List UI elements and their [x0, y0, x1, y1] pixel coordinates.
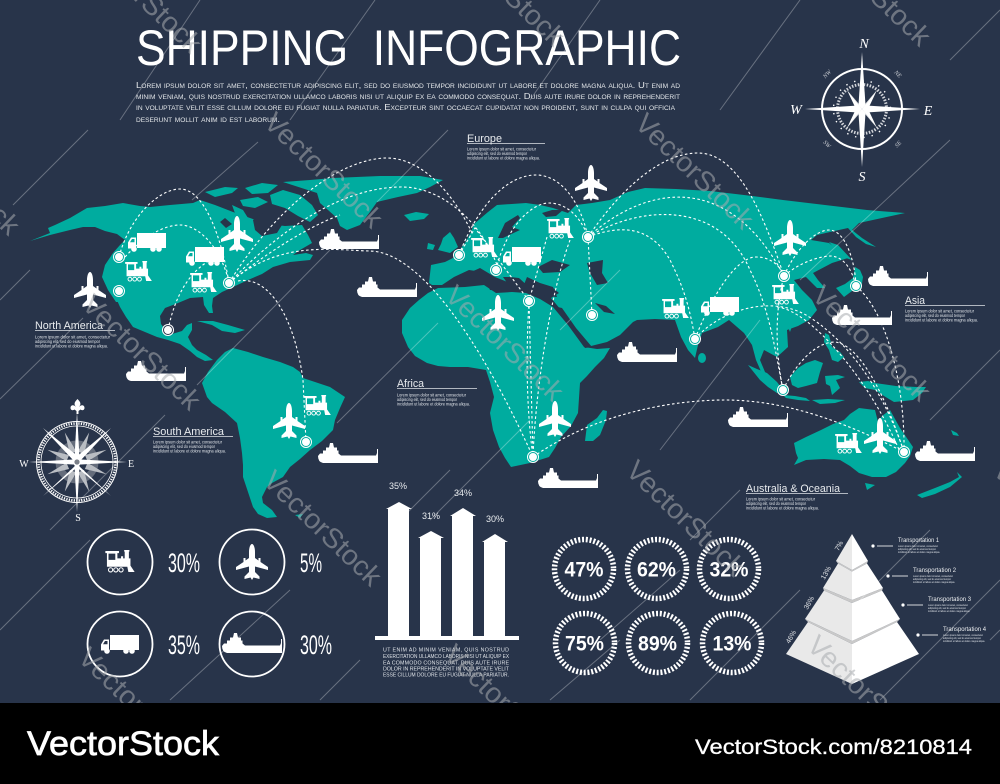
compass rose: top right: NW — [822, 69, 834, 81]
pyramid legend: Transportation 1: Transportation 1 — [898, 538, 940, 544]
bar chart caption: EA COMMODO CONSEQUAT. DUIS AUTE IRURE — [383, 660, 509, 666]
label: North America: North America — [35, 320, 104, 332]
pyramid legend: Transportation 2: Transportation 2 — [913, 568, 957, 574]
compass rose: bottom left — [19, 399, 134, 524]
pyramid legend: Transportation 3: incididunt ut labore et dolore magna aliqua. — [928, 609, 970, 613]
pyramid legend: Transportation 2: Lorem ipsum dolor sit amet, consectetur — [913, 574, 953, 578]
label: Africa: incididunt ut labore et dolore magna aliqua. — [397, 402, 470, 406]
transport share: train 30% — [88, 530, 200, 594]
label: Africa — [397, 378, 477, 406]
watermark: VectorStock — [72, 641, 204, 770]
map icons: trucks — [128, 233, 739, 316]
transport share: truck 35%: 35% — [168, 630, 200, 660]
dial 13%: 13% — [712, 632, 752, 656]
land: Canadian Arctic islands — [205, 183, 318, 222]
label: South America: adipiscing elit, sed do eiusmod tempor — [153, 444, 216, 449]
dial 75%: 75% — [565, 632, 604, 656]
land: Taiwan and Philippines — [788, 326, 844, 362]
watermark: VectorStock — [258, 106, 390, 235]
label: Europe: adipiscing elit, sed do eiusmod tempor — [467, 151, 528, 156]
intro paragraph: in voluptate velit esse cillum dolore eu fugiat nulla pariatur. Excepteur sint occaecat cupidatat non proident, sunt in culpa qui officia — [136, 102, 675, 112]
transport share: ship 30%: 30% — [300, 630, 332, 660]
pyramid legend: Transportation 1: incididunt ut labore et dolore magna aliqua. — [898, 550, 940, 554]
label: Europe — [467, 133, 545, 160]
inland seas — [220, 210, 615, 348]
dial 13% — [702, 614, 762, 672]
pyramid legend: Transportation 1: adipiscing elit, sed do eiusmod tempor — [898, 547, 936, 551]
label: Asia: adipiscing elit, sed do eiusmod tempor — [905, 313, 966, 318]
footer image id: VectorStock.com/8210814 — [695, 736, 972, 759]
bar chart caption: UT ENIM AD MINIM VENIAM, QUIS NOSTRUD — [383, 648, 509, 654]
label: South America — [153, 426, 233, 454]
dial 32% — [700, 540, 758, 598]
land: Sri Lanka — [698, 353, 706, 363]
map icons: trains — [125, 218, 862, 453]
land: Java and Sunda — [783, 395, 845, 404]
label: South America: Lorem ipsum dolor sit amet, consectetur — [153, 440, 223, 444]
compass rose: top right: N — [858, 37, 869, 52]
dial 47% — [554, 540, 614, 598]
dial 62%: 62% — [637, 558, 676, 582]
land: Caribbean — [197, 321, 245, 333]
dial 62% — [628, 540, 686, 598]
compass rose: top right — [790, 37, 933, 185]
arrow bar chart: 34% — [454, 488, 472, 498]
land: Sumatra — [748, 365, 783, 394]
label: Asia: Asia — [905, 295, 926, 307]
map icons: ships — [126, 229, 975, 488]
intro paragraph: deserunt mollit anim id est laborum. — [136, 114, 280, 124]
arrow bar chart: 30% — [486, 514, 504, 524]
pyramid legend: Transportation 3: Transportation 3 — [928, 597, 972, 603]
land: Madagascar — [585, 410, 607, 441]
pyramid chart: 46% — [785, 629, 798, 645]
land: North America — [30, 200, 313, 361]
pyramid legend: Transportation 4: adipiscing elit, sed do eiusmod tempor — [943, 636, 981, 640]
pyramid legend: Transportation 3 — [901, 597, 972, 613]
label: Africa: Africa — [397, 378, 425, 390]
intro paragraph — [136, 80, 681, 124]
dial 89%: 89% — [638, 632, 677, 656]
label: Europe: incididunt ut labore et dolore magna aliqua. — [467, 156, 540, 160]
compass rose: bottom left: W — [19, 459, 29, 470]
transport share: plane 5% — [220, 530, 322, 594]
arrow bar chart: 31% — [422, 511, 440, 521]
pyramid chart: 13% — [820, 565, 833, 581]
label: North America: Lorem ipsum dolor sit amet, consectetur — [35, 334, 111, 340]
label: Europe: Europe — [467, 133, 502, 145]
land: Borneo — [790, 360, 823, 388]
arrow bar chart — [375, 481, 519, 640]
footer band — [0, 703, 1000, 784]
pyramid chart: 36% — [803, 595, 816, 611]
watermark: VectorStock — [76, 288, 208, 417]
bar chart caption: ESSE CILLUM DOLORE EU FUGIAT NULLA PARIATUR. — [383, 672, 509, 678]
pyramid legend: Transportation 4: Lorem ipsum dolor sit amet, consectetur — [943, 633, 983, 637]
bar chart caption: DOLOR IN REPREHENDERIT IN VOLUPTATE VELIT — [383, 666, 510, 672]
compass rose: top right: W — [790, 103, 803, 118]
transport share: plane 5%: 5% — [300, 548, 322, 578]
footer logo text: VectorStock — [27, 725, 220, 763]
label: Asia: incididunt ut labore et dolore magna aliqua. — [905, 318, 978, 322]
map icons: planes — [74, 165, 896, 454]
title: SHIPPING INFOGRAPHIC — [136, 20, 681, 76]
pyramid legend: Transportation 1: Lorem ipsum dolor sit amet, consectetur — [898, 544, 938, 548]
land: Tasmania and New Zealand — [865, 430, 962, 498]
land: Greenland — [283, 176, 443, 230]
pyramid legend: Transportation 3: Lorem ipsum dolor sit amet, consectetur — [928, 603, 968, 607]
label: Australia and Oceania: Lorem ipsum dolor sit amet, consectetur — [746, 496, 816, 502]
label: Australia and Oceania: adipiscing elit, sed do eiusmod tempor — [746, 501, 807, 506]
shipping route lines — [119, 153, 904, 457]
pyramid chart — [785, 534, 919, 684]
compass rose: top right: SE — [894, 140, 903, 149]
land: Falkland — [295, 514, 303, 518]
watermark: VectorStock — [629, 107, 761, 236]
label: North America — [35, 320, 115, 348]
percentage dials — [554, 540, 762, 672]
land: Sulawesi — [825, 375, 845, 395]
pyramid legend: Transportation 2 — [886, 568, 957, 584]
land: Iceland and UK — [404, 212, 458, 253]
label: North America: adipiscing elit, sed do eiusmod tempor — [35, 339, 101, 344]
intro paragraph: minim veniam, quis nostrud exercitation ullamco laboris nisi ut aliquip ex ea commodo consequat. Duis aute irure dolor in reprehenderit — [136, 91, 680, 101]
transport share: ship 30% — [220, 612, 332, 676]
pyramid legend: Transportation 4: incididunt ut labore et dolore magna aliqua. — [943, 639, 985, 643]
label: Europe: Lorem ipsum dolor sit amet, consectetur — [467, 146, 537, 152]
dial 32%: 32% — [710, 558, 749, 582]
watermark: VectorStock — [257, 464, 389, 593]
land: Eurasia — [429, 188, 905, 380]
pyramid legend: Transportation 1 — [871, 538, 940, 554]
route hubs — [114, 232, 910, 462]
land: Australia — [794, 408, 913, 477]
pyramid legend: Transportation 2: adipiscing elit, sed do eiusmod tempor — [913, 577, 951, 581]
compass rose: top right: SW — [821, 140, 832, 150]
label: Australia and Oceania — [746, 483, 848, 510]
watermark: VectorStock — [439, 279, 571, 408]
compass rose: bottom left: E — [128, 459, 134, 470]
land: Africa — [402, 285, 610, 467]
arrow bar chart: 35% — [389, 481, 407, 491]
compass rose: top right: NE — [892, 69, 902, 80]
dial 47%: 47% — [564, 558, 604, 582]
intro paragraph: Lorem ipsum dolor sit amet, consectetur adipiscing elit, sed do eiusmod tempor incididunt ut labore et dolore magna aliqua. Ut enim ad — [136, 80, 681, 90]
label: Australia and Oceania: incididunt ut labore et dolore magna aliqua. — [746, 506, 819, 510]
label: South America: incididunt ut labore et dolore magna aliqua. — [153, 448, 226, 454]
land: New Guinea — [859, 381, 926, 402]
label: Africa: Lorem ipsum dolor sit amet, consectetur — [397, 392, 467, 398]
label: South America: South America — [153, 426, 225, 438]
dial 75% — [556, 614, 614, 672]
transport share: train 30%: 30% — [168, 548, 200, 578]
label: Australia and Oceania: Australia & Oceania — [746, 483, 841, 495]
pyramid legend: Transportation 3: adipiscing elit, sed do eiusmod tempor — [928, 606, 966, 610]
watermark: VectorStock — [438, 638, 570, 767]
compass rose: top right: S — [858, 170, 866, 185]
land: South America — [202, 348, 345, 518]
pyramid legend: Transportation 4: Transportation 4 — [943, 627, 987, 633]
watermark: VectorStock — [620, 454, 752, 583]
compass rose: bottom left: S — [75, 513, 81, 524]
label: Asia: Lorem ipsum dolor sit amet, consectetur — [905, 308, 975, 314]
pyramid legend: Transportation 4 — [916, 627, 987, 643]
watermark: VectorStock — [801, 629, 933, 758]
watermark: VectorStock — [806, 279, 938, 408]
pyramid legend: Transportation 2: incididunt ut labore et dolore magna aliqua. — [913, 580, 955, 584]
transport share: truck 35% — [88, 612, 200, 676]
world map landmasses — [30, 176, 962, 518]
dial 89% — [628, 614, 688, 672]
pyramid chart: 7% — [834, 540, 845, 552]
compass rose: top right: E — [923, 104, 933, 119]
label: Asia — [905, 295, 985, 322]
bar chart caption — [383, 648, 510, 678]
label: North America: incididunt ut labore et dolore magna aliqua. — [35, 344, 108, 348]
bar chart caption: EXERCITATION ULLAMCO LABORIS NISI UT ALIQUIP EX — [383, 654, 509, 660]
label: Africa: adipiscing elit, sed do eiusmod tempor — [397, 397, 458, 402]
land: Japan, Sakhalin — [829, 242, 863, 297]
